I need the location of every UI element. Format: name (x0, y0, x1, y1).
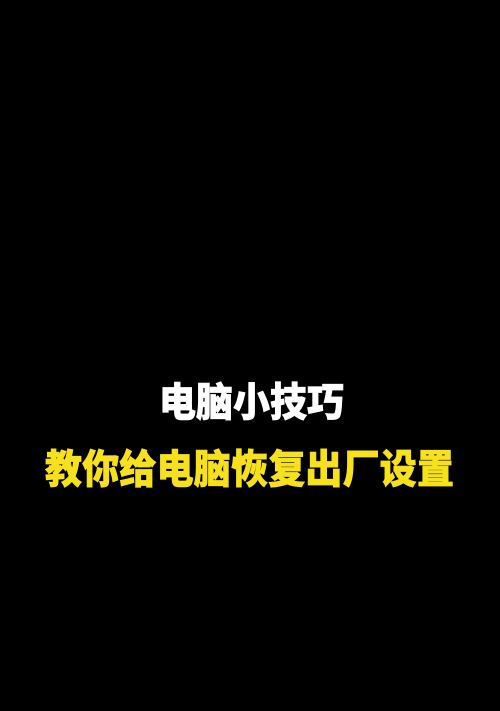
title: white heading: 电脑小技巧 (159, 380, 344, 425)
subtitle: yellow heading: 教你给电脑恢复出厂设置 (45, 447, 454, 492)
